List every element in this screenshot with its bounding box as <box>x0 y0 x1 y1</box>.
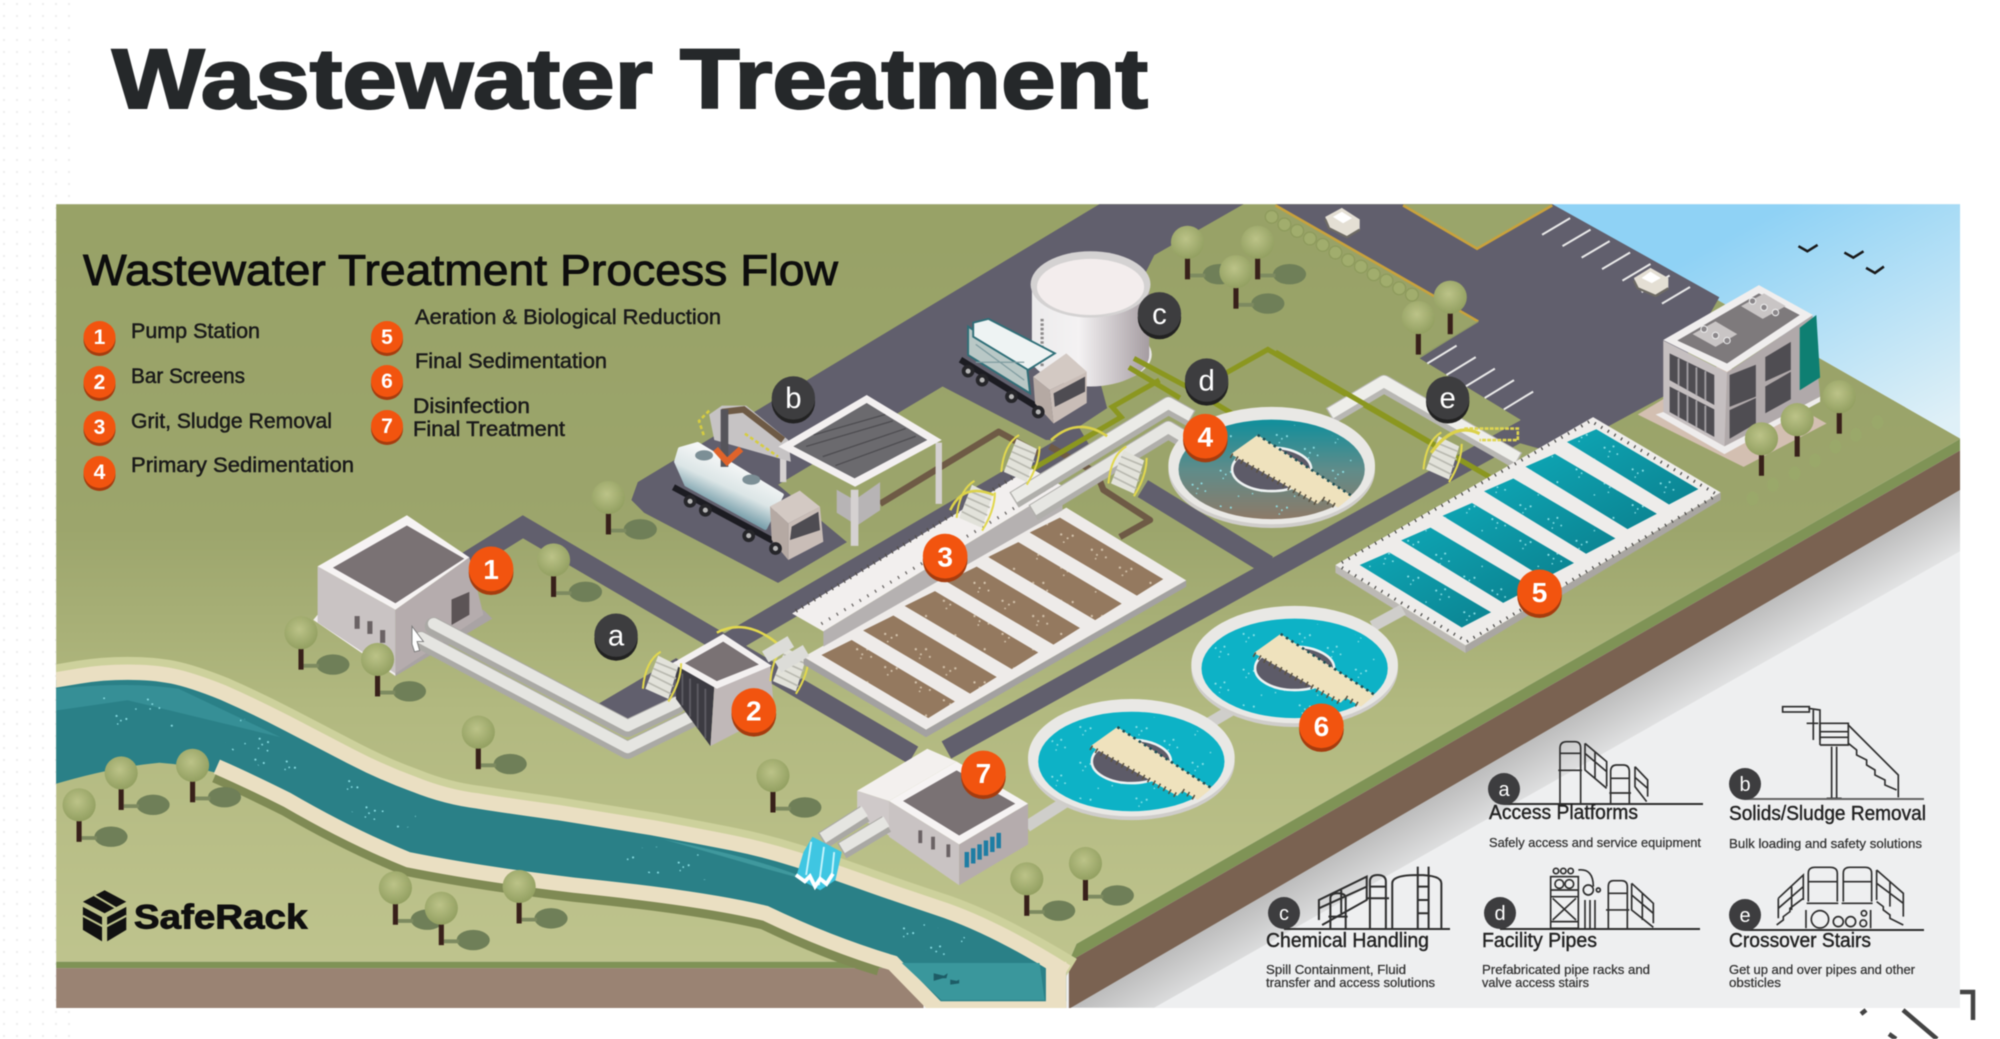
bar screen access stairs <box>643 627 809 702</box>
marker c <box>1138 292 1181 339</box>
process legend: Final Treatment <box>413 418 565 441</box>
solution c: chemical handling: Spill Containment, Fluid <box>1266 963 1406 977</box>
solution d: facility pipes <box>1482 868 1700 990</box>
marker 5 <box>1517 570 1562 618</box>
process legend: Grit, Sludge Removal <box>131 410 332 433</box>
parking lot <box>1276 204 1719 454</box>
marker 1 <box>469 547 513 595</box>
process legend: Primary Sedimentation <box>131 454 354 477</box>
storage tank c <box>1029 251 1152 386</box>
outfall pipes and waterfall <box>796 811 886 890</box>
sky <box>1550 204 1960 439</box>
river <box>26 672 1069 1009</box>
solution d: facility pipes: d <box>1494 903 1506 925</box>
canopy legs and block b <box>783 443 939 546</box>
solution e: crossover stairs: e <box>1739 905 1751 927</box>
marker 5: 5 <box>1532 577 1547 608</box>
process legend: Aeration & Biological Reduction <box>415 306 721 329</box>
solution d: facility pipes: Facility Pipes <box>1482 930 1597 952</box>
marker d <box>1185 358 1228 406</box>
SafeRack logo: SafeRack <box>134 899 308 937</box>
solution e: crossover stairs: obsticles <box>1729 976 1781 990</box>
transfer pipes to bar screens <box>421 624 695 750</box>
grit and sludge tank 3 <box>792 468 1186 737</box>
solution a: access platforms: Access Platforms <box>1489 802 1638 824</box>
pipe to aeration basin <box>1330 381 1518 460</box>
stairs and yellow platforms along channel <box>950 427 1147 531</box>
stairs e <box>1423 429 1518 482</box>
pump station building 1 <box>313 515 492 676</box>
marker a <box>594 614 638 661</box>
bar screen structure 2 <box>672 634 774 746</box>
marker a: a <box>608 619 625 652</box>
platform rim and soil <box>56 439 1960 1009</box>
parking stripes <box>1427 218 1690 409</box>
ground platform <box>56 204 1960 962</box>
cursor <box>412 626 423 652</box>
marker 4 <box>1183 414 1228 462</box>
process legend: 4 <box>94 461 106 484</box>
title: Wastewater Treatment <box>112 32 1148 126</box>
marker b <box>772 376 815 423</box>
solution b: solids and sludge removal <box>1729 707 1926 851</box>
olive chemical pipes <box>1032 349 1490 477</box>
solution e: crossover stairs: Crossover Stairs <box>1729 930 1871 952</box>
marker e: e <box>1440 382 1456 415</box>
marker d: d <box>1198 364 1215 397</box>
marker 3 <box>923 534 967 582</box>
final clarifier lower <box>1028 699 1235 820</box>
final clarifier 6 <box>1191 606 1398 727</box>
solution c: chemical handling: transfer and access solutions <box>1266 976 1435 990</box>
marker e <box>1426 376 1469 423</box>
process legend: Final Sedimentation <box>415 350 607 373</box>
panel heading: Wastewater Treatment Process Flow <box>83 246 838 295</box>
dotted page background <box>0 0 70 1039</box>
solution d: facility pipes: Prefabricated pipe racks and <box>1482 963 1650 977</box>
solution c: chemical handling: Chemical Handling <box>1266 930 1429 952</box>
corner mark <box>1861 992 1973 1039</box>
marker 1: 1 <box>483 554 499 585</box>
solution c: chemical handling <box>1266 867 1450 990</box>
SafeRack logo <box>83 890 308 941</box>
process legend: 7 <box>381 415 393 438</box>
marker c: c <box>1152 298 1167 331</box>
solution b: solids and sludge removal: Bulk loading and safety solutions <box>1729 837 1922 851</box>
conveyor <box>699 406 791 462</box>
marker 4: 4 <box>1198 421 1214 452</box>
solution b: solids and sludge removal: b <box>1739 774 1751 796</box>
solution a: access platforms: a <box>1498 779 1510 801</box>
solution a: access platforms <box>1488 742 1703 850</box>
container truck c <box>960 319 1087 423</box>
tanker truck b <box>673 409 823 560</box>
solution c: chemical handling: c <box>1279 903 1289 925</box>
process legend <box>84 306 721 491</box>
canopy roof <box>778 395 942 487</box>
roads and pad <box>466 204 1719 755</box>
birds <box>1798 245 1884 273</box>
process legend: Disinfection <box>413 395 530 418</box>
process legend: Pump Station <box>131 320 260 343</box>
process legend: Bar Screens <box>131 365 245 388</box>
background trees <box>62 226 1467 950</box>
process legend: 3 <box>94 416 105 439</box>
hedge <box>1265 210 1418 301</box>
aeration basins 5 <box>1335 417 1721 653</box>
parked cars <box>1325 208 1668 296</box>
process legend: 6 <box>381 370 393 393</box>
process legend: 1 <box>94 326 106 349</box>
solution e: crossover stairs: Get up and over pipes and other <box>1729 963 1915 977</box>
process legend: 2 <box>94 371 105 394</box>
marker 7 <box>961 751 1006 799</box>
office building <box>1638 285 1827 467</box>
disinfection building 7 <box>857 749 1028 885</box>
primary clarifier 4 <box>1168 407 1375 528</box>
connecting pipes between tanks <box>1027 610 1403 827</box>
solution e: crossover stairs <box>1729 867 1924 990</box>
marker 6: 6 <box>1314 711 1329 742</box>
solution a: access platforms: Safely access and service equipment <box>1489 836 1702 850</box>
foreground trees by pump station <box>284 616 426 702</box>
marker 3: 3 <box>937 541 953 572</box>
solution d: facility pipes: valve access stairs <box>1482 976 1589 990</box>
marker 2: 2 <box>746 696 762 727</box>
solution b: solids and sludge removal: Solids/Sludge Removal <box>1729 803 1926 825</box>
marker 6 <box>1299 703 1344 752</box>
brown sludge pipe <box>880 432 1167 537</box>
panel: isometric plant scene <box>26 204 1960 1009</box>
marker b: b <box>785 382 802 415</box>
process legend: 5 <box>381 326 393 349</box>
office trees and bushes <box>1744 381 1851 476</box>
main process pipes to clarifier 4 <box>765 403 1194 667</box>
marker 2 <box>731 688 776 737</box>
marker 7: 7 <box>976 758 991 789</box>
